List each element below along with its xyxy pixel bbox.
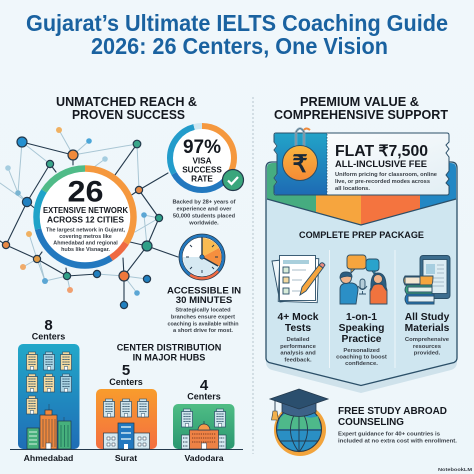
ticket: flat fee: live, or pre-recorded modes across: [335, 179, 430, 185]
title: Gujarat’s Ultimate IELTS Coaching Guide: [26, 10, 448, 36]
network diagram: [0, 127, 178, 309]
column: speaking practice: confidence.: [345, 361, 378, 367]
stat circle: 26 centers: EXTENSIVE NETWORK: [43, 206, 128, 215]
icon: tablet and books: [404, 256, 450, 304]
stat circle: 97 percent visa success: VISA: [192, 156, 212, 166]
text: accessible in 30 minutes: ACCESSIBLE IN: [167, 286, 241, 296]
column: study materials: [404, 256, 450, 356]
heading: center distribution: IN MAJOR HUBS: [133, 352, 205, 362]
heading: premium value: PREMIUM VALUE &: [300, 95, 419, 109]
text: accessible in 30 minutes: coaching is available within: [168, 322, 238, 328]
column: speaking practice: Practice: [341, 334, 382, 345]
column: mock tests: analysis and: [280, 350, 316, 356]
title: [26, 10, 448, 59]
text: accessible in 30 minutes: 30 MINUTES: [176, 295, 233, 306]
stat circle: 26 centers: 26: [68, 176, 104, 208]
heading: center distribution: [117, 342, 221, 362]
ticket: flat fee: Uniform pricing for classroom, online: [335, 172, 437, 178]
text: accessible in 30 minutes: branches ensure expert: [171, 314, 235, 320]
heading: unmatched reach: UNMATCHED REACH &: [56, 95, 197, 109]
stat circle: 97 percent visa success: [170, 126, 244, 190]
chevron colour band: [267, 163, 456, 225]
text: backed by: Backed by 28+ years of: [172, 200, 236, 206]
stat circle: 26 centers: ACROSS 12 CITIES: [47, 216, 125, 224]
column: speaking practice: 1-on-1: [346, 312, 377, 323]
stat circle: 26 centers: [36, 168, 134, 266]
title: 2026: 26 Centers, One Vision: [91, 33, 388, 59]
bar labels: Surat: [115, 453, 137, 463]
bar labels: Vadodara: [184, 453, 224, 463]
text: backed by: worldwide.: [188, 220, 219, 226]
stat circle: 26 centers: Ahmedabad and regional: [53, 240, 118, 246]
column: study materials: Comprehensive: [405, 337, 450, 343]
stat circle: 97 percent visa success: 97%: [183, 137, 221, 158]
heading: premium value: [274, 95, 448, 122]
stat circle: 26 centers: covering metros like: [59, 234, 112, 240]
bar: Ahmedabad 8 centers: 8: [44, 317, 53, 334]
text: accessible in 30 minutes: Strategically located: [175, 308, 231, 314]
bar: Vadodara 4 centers: Centers: [187, 392, 221, 402]
callout: free study abroad counseling: [338, 406, 458, 444]
text: accessible in 30 minutes: a short drive for most.: [173, 328, 233, 334]
ticket: flat fee: all locations.: [335, 186, 371, 192]
heading: unmatched reach: PROVEN SUCCESS: [72, 108, 185, 122]
subheading: COMPLETE PREP PACKAGE: [299, 230, 424, 240]
column: study materials: resources: [413, 344, 442, 350]
icon: checklist and pencil: [272, 256, 325, 303]
bar labels: [24, 453, 224, 463]
ticket: flat fee: [274, 128, 449, 195]
column: speaking practice: coaching to boost: [336, 354, 387, 360]
bar: Vadodara 4 centers: 4: [200, 377, 209, 394]
stat circle: 97 percent visa success: RATE: [191, 174, 213, 184]
column: study materials: All Study: [405, 312, 450, 323]
icon: rupee tag: ₹: [292, 151, 308, 178]
column: study materials: Materials: [405, 323, 450, 334]
ticket: flat fee: ALL-INCLUSIVE FEE: [335, 158, 427, 169]
bar: Surat 5 centers: 5: [122, 362, 130, 379]
callout: free study abroad counseling: COUNSELING: [338, 417, 404, 428]
column: mock tests: feedback.: [284, 358, 312, 364]
column: mock tests: [272, 256, 325, 364]
column: speaking practice: Speaking: [339, 323, 384, 334]
panel: complete prep package: [266, 162, 457, 393]
icon: two speakers and mic: [340, 255, 387, 304]
heading: center distribution: CENTER DISTRIBUTION: [117, 342, 221, 352]
ticket: flat fee: FLAT ₹7,500: [335, 143, 428, 160]
column: mock tests: performance: [280, 344, 317, 350]
column: speaking practice: Personalized: [343, 348, 380, 354]
heading: unmatched reach: [56, 95, 197, 122]
icon: check badge: [222, 170, 244, 190]
icon: rupee tag: [282, 128, 318, 180]
stat circle: 26 centers: The largest network in Gujarat,: [46, 228, 126, 234]
callout: free study abroad counseling: included at no extra cost with enrollment.: [338, 438, 458, 444]
column: speaking practice: [336, 255, 387, 367]
heading: premium value: COMPREHENSIVE SUPPORT: [274, 108, 448, 122]
text: accessible in 30 minutes: [167, 286, 241, 334]
callout: free study abroad counseling: Expert guidance for 40+ countries is: [338, 432, 440, 438]
text: backed by: 50,000 students placed: [173, 214, 236, 220]
bar: Ahmedabad 8 centers: [18, 317, 80, 449]
bar: Vadodara 4 centers: [173, 377, 234, 449]
bar: Ahmedabad 8 centers: Centers: [32, 332, 65, 342]
bar: Surat 5 centers: [96, 362, 157, 449]
network nodes: [2, 137, 163, 309]
column: study materials: provided.: [414, 350, 441, 356]
icon: graduation cap and globe: [270, 389, 328, 456]
bar: Surat 5 centers: Centers: [109, 377, 143, 387]
stat circle: 97 percent visa success: SUCCESS: [182, 166, 222, 174]
text: backed by: [172, 200, 236, 226]
bar labels: Ahmedabad: [24, 453, 73, 463]
icon: clock: [179, 234, 225, 280]
column: mock tests: Detailed: [287, 337, 310, 343]
column: mock tests: Tests: [285, 323, 311, 334]
callout: free study abroad counseling: FREE STUDY ABROAD: [338, 406, 447, 417]
text: backed by: experience and over: [176, 206, 232, 212]
stat circle: 26 centers: hubs like Visnagar.: [61, 247, 110, 253]
column: mock tests: 4+ Mock: [278, 312, 319, 323]
watermark: NotebookLM: [438, 467, 473, 472]
